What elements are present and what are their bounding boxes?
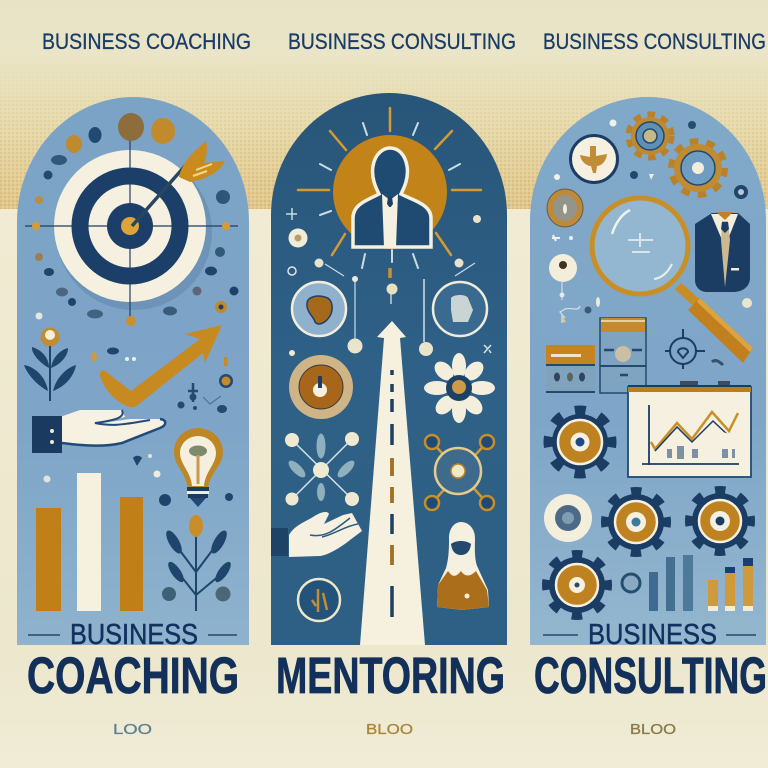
icon: round badge <box>570 136 618 182</box>
road with arrow <box>360 321 425 645</box>
icon: branching plant <box>162 515 234 611</box>
panel background arch <box>530 97 766 645</box>
icon: mentor figure <box>333 135 447 249</box>
panel: mentoring <box>271 93 507 645</box>
small star <box>484 345 491 353</box>
icon: small ring <box>622 574 640 592</box>
panel: business coaching <box>17 97 249 651</box>
icon: magnifying glass <box>592 198 753 363</box>
icon: navy gear lower <box>547 555 607 615</box>
icon: navy gear large <box>549 411 611 473</box>
icon: gold gear right <box>673 143 723 193</box>
icon: gold medallion <box>547 189 583 227</box>
icon: gold node network right <box>425 435 494 510</box>
heading: coaching: COACHING <box>27 647 239 704</box>
panel background arch <box>271 93 507 645</box>
small network symbols <box>286 208 481 356</box>
icon: node network left <box>285 432 359 506</box>
icon: sun rays <box>298 108 481 268</box>
arrow: gold growth check <box>100 325 222 407</box>
icon: light bulb <box>174 428 223 507</box>
icon: small pin <box>549 254 752 323</box>
label: business: BUSINESS <box>70 619 198 651</box>
icon: circle with bust left <box>292 282 346 336</box>
bar chart small <box>649 555 753 611</box>
connector lines with nodes <box>348 276 433 356</box>
icon: mentor bust <box>437 522 489 610</box>
footer label: left: LOO <box>113 721 152 738</box>
small dots lower <box>44 454 233 506</box>
chart: line chart window <box>628 381 751 477</box>
bar chart <box>36 473 143 611</box>
label: business: BUSINESS <box>588 619 717 651</box>
icon: tall dashboard card <box>600 318 646 393</box>
icon: open hand <box>32 410 165 453</box>
icon: lens ring <box>544 494 592 542</box>
panel background arch <box>17 97 249 645</box>
icon: circle badge <box>298 579 340 621</box>
small symbols cluster <box>178 357 233 413</box>
decorative dots around target <box>32 113 238 362</box>
heading: mentoring: MENTORING <box>276 647 505 704</box>
icon: small dashboard card <box>546 345 595 393</box>
icon: navy gear right <box>690 491 750 551</box>
top heading: business consulting centre: BUSINESS CONSULTING <box>288 29 516 54</box>
icon: plant with bud <box>24 328 76 401</box>
textured tan band <box>0 55 768 209</box>
footer label: centre: BLOO <box>366 721 413 738</box>
panel: consulting <box>530 97 766 651</box>
icon: flower <box>424 353 495 423</box>
icon: helping hand <box>271 512 362 557</box>
top heading: business coaching: BUSINESS COACHING <box>42 29 251 54</box>
small specks <box>552 120 748 241</box>
icon: small crosshair <box>665 329 723 369</box>
icon: target with arrow <box>25 140 238 319</box>
icon: business suit <box>695 212 750 292</box>
footer label: right: BLOO <box>630 721 676 738</box>
icon: circle with arch right <box>433 282 487 336</box>
icon: gold button <box>289 355 353 419</box>
icon: navy gear middle <box>606 492 666 552</box>
icon: gold gear top <box>630 116 670 156</box>
